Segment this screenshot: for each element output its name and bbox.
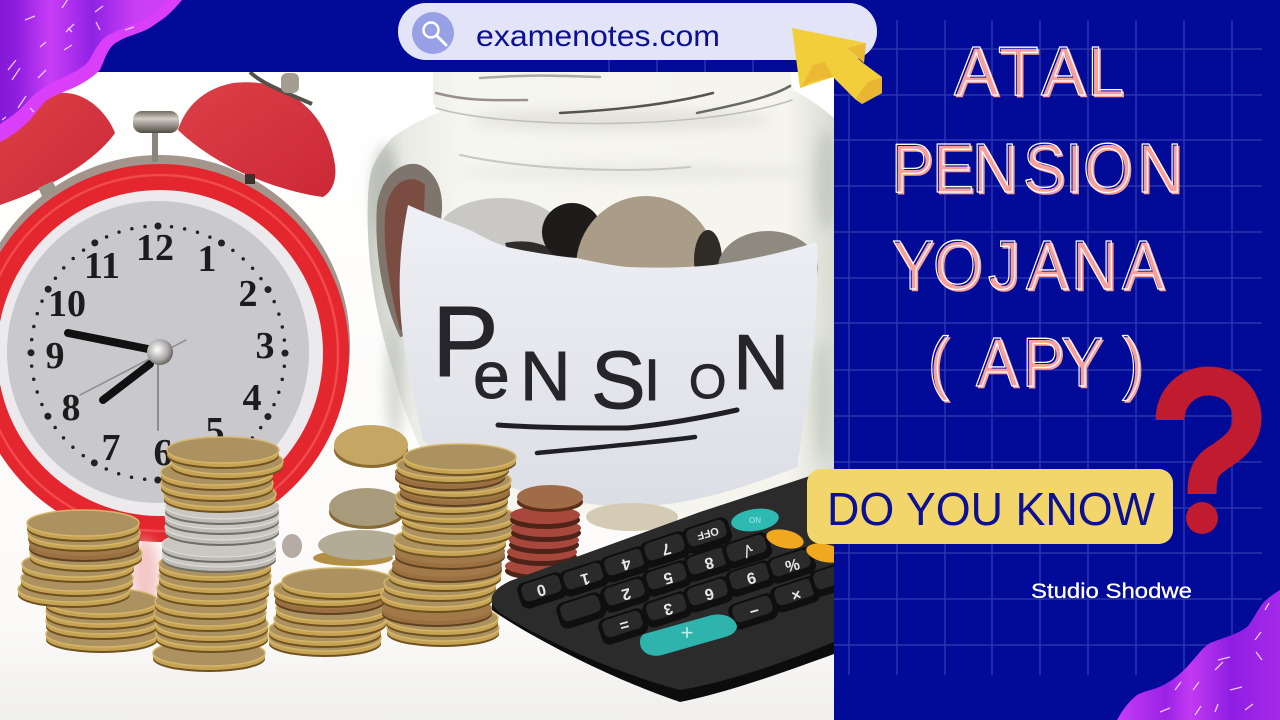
background grid: [600, 20, 1262, 675]
clock foot: [282, 534, 302, 558]
title line: ATAL: ATAL: [956, 34, 1126, 112]
calculator shadow edge: [492, 600, 834, 702]
coin stack: right: [381, 444, 516, 647]
glass jar with coins and pension label: [368, 72, 838, 531]
title line: PENSION: PENSION: [891, 130, 1182, 208]
calculator key labels: 3: [662, 599, 675, 618]
clock centre hub: [147, 339, 173, 365]
blob rim: [0, 0, 182, 142]
left bell: [0, 93, 115, 205]
photo backdrop: [0, 72, 834, 720]
paper label: [400, 205, 817, 507]
decorative blob: bottom right: [1117, 590, 1280, 720]
handwritten word: I: [644, 348, 660, 413]
clock numerals: 8: [62, 387, 80, 429]
title line: PENSION: PENSION: [893, 132, 1184, 210]
jar body: [368, 72, 834, 520]
clock numerals: 5: [206, 410, 224, 452]
calculator key labels: 4: [620, 554, 633, 573]
title line: YOJANA: YOJANA: [894, 229, 1167, 307]
clock numerals: 9: [46, 335, 64, 377]
calculator body: [492, 470, 834, 690]
on key: ON: [749, 516, 761, 525]
red reflection on table: [131, 537, 159, 613]
title line: YOJANA: YOJANA: [892, 227, 1165, 305]
handwritten word: N: [520, 337, 571, 415]
coin below label: [586, 503, 678, 531]
decorative blob: top left: [0, 0, 182, 142]
clock numerals: 2: [238, 273, 258, 315]
calculator key labels: 7: [660, 539, 673, 558]
coin stack: far left lower: [46, 588, 158, 653]
calculator key labels: 1: [579, 569, 592, 588]
handwritten underlines: [498, 410, 737, 453]
alarm striker: [133, 111, 179, 162]
hour dots: [31, 226, 285, 480]
blob inner folds: [0, 0, 168, 124]
icon: red question mark: [1170, 381, 1247, 534]
calculator key labels: %: [783, 554, 801, 574]
copper coin stack: [505, 485, 583, 580]
plus key: +: [681, 620, 693, 645]
search bar pill: [398, 3, 877, 60]
search bar: [398, 3, 877, 60]
handwritten word: S: [591, 335, 646, 426]
clock numerals: 3: [256, 325, 274, 367]
calculator key labels: ×: [789, 585, 803, 604]
calculator key labels: [535, 524, 803, 634]
blob white flecks: [2, 0, 134, 120]
title line: APY: ( APY ): [928, 324, 1143, 402]
coins inside the jar: [376, 164, 818, 338]
author credit: Studio Shodwe: [1031, 580, 1192, 603]
clock numerals: 12: [136, 227, 174, 269]
bell top bolt: [250, 72, 312, 104]
title line: APY: ( APY ): [930, 326, 1145, 404]
coin stack: short centre: [269, 568, 394, 657]
calculator key labels: OFF: [695, 524, 720, 542]
calculator key labels: 5: [662, 568, 675, 587]
bell brackets: [38, 174, 255, 199]
calculator keys: [517, 517, 834, 644]
clock numerals: 7: [102, 427, 120, 469]
title: [891, 32, 1184, 404]
website address: examenotes.com: [476, 20, 720, 53]
loose coins: [313, 425, 408, 566]
callout: do you know: DO YOU KNOW: [827, 483, 1156, 535]
clock numerals: 11: [84, 245, 120, 287]
on key: [730, 506, 780, 534]
jar neck rings: [436, 76, 792, 170]
clock numerals: 4: [242, 377, 262, 419]
clock face: [7, 201, 309, 503]
coin stack: tall centre: [153, 437, 283, 672]
red case: [0, 164, 349, 542]
calculator: [492, 470, 861, 702]
handwritten word: e: [473, 338, 510, 412]
jar soft glass shading: [372, 110, 838, 460]
calculator key labels: 8: [703, 553, 716, 572]
calculator key labels: 6: [703, 584, 716, 603]
calculator key labels: 9: [745, 568, 758, 587]
coin stack: far left upper: [18, 510, 142, 608]
white rim: [0, 190, 323, 516]
metal back band: [0, 83, 350, 378]
clock numerals: 10: [48, 283, 86, 325]
alarm clock: [0, 72, 350, 558]
right bell: [178, 82, 335, 197]
minute dots: [31, 226, 285, 480]
callout: do you know: [807, 469, 1173, 544]
clock hands: [68, 333, 186, 430]
clock numerals: 1: [198, 238, 216, 280]
icon: magnifier: [412, 12, 454, 54]
icon: yellow pointer arrow: [792, 28, 882, 104]
photo: clock, jar, coins and calculator: [0, 72, 861, 720]
handwritten word: P: [432, 286, 499, 398]
calculator key labels: 0: [535, 580, 548, 599]
handwritten word: N: [733, 318, 789, 406]
calculator key labels: −: [747, 601, 761, 620]
plus key: [640, 615, 737, 656]
clock numerals: 6: [154, 432, 172, 474]
calculator key labels: 2: [620, 584, 633, 603]
orange keys: [765, 526, 845, 566]
handwritten word: O: [689, 356, 726, 409]
clock numerals: [46, 227, 274, 474]
calculator key labels: =: [617, 615, 631, 634]
title line: ATAL: ATAL: [954, 32, 1124, 110]
calculator key labels: √: [742, 540, 755, 559]
